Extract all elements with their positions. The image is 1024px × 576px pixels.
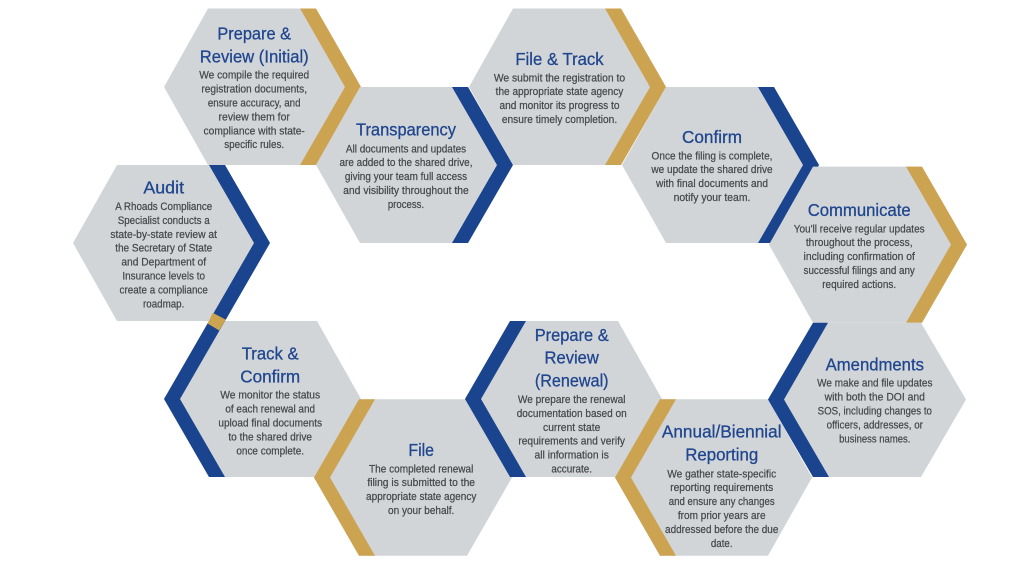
panel: Amendments xyxy=(768,323,966,477)
heading: Annual/Biennial Reporting: Reporting xyxy=(685,445,758,465)
accent chevron: gold xyxy=(615,399,676,556)
text: File & Track description: and monitor its progress to xyxy=(500,100,620,112)
text: Track & Confirm description: once complete. xyxy=(236,445,304,457)
heading: Annual/Biennial Reporting xyxy=(662,422,782,465)
text: Track & Confirm description: We monitor the status xyxy=(220,390,321,402)
text: Prepare & Review (Renewal) description: We prepare the renewal xyxy=(518,394,626,406)
heading: Annual/Biennial Reporting: Annual/Biennial xyxy=(662,422,782,442)
heading: Audit: Audit xyxy=(143,178,184,198)
panel: Communicate xyxy=(769,167,967,323)
text: Confirm description: Once the filing is complete, xyxy=(652,150,772,162)
text: Annual/Biennial Reporting description: and ensure any changes xyxy=(669,496,775,508)
connector: gold link between Audit and Track & Confirm xyxy=(208,313,226,330)
text: Prepare & Review (Renewal) description: requirements and verify xyxy=(518,436,626,448)
text: Prepare & Review description: review them for xyxy=(219,111,290,123)
text: Annual/Biennial Reporting description: addressed before the due xyxy=(665,524,778,536)
text: Communicate description: successful filings and any xyxy=(804,265,915,277)
heading: Amendments: Amendments xyxy=(826,354,924,374)
text: Track & Confirm description: upload final documents xyxy=(218,418,323,430)
accent chevron: blue xyxy=(452,87,513,243)
heading: Communicate: Communicate xyxy=(808,200,911,220)
text: Transparency description: giving your team full access xyxy=(345,171,468,183)
text: Prepare & Review (Renewal) description: all information is xyxy=(535,450,609,462)
text: Audit description: roadmap. xyxy=(143,298,184,310)
panel: Transparency xyxy=(316,87,513,243)
heading: Prepare & Review (Initial): Prepare & xyxy=(217,24,291,44)
panel: Confirm xyxy=(622,87,819,243)
accent chevron: gold xyxy=(314,399,375,556)
text: Audit description: create a compliance xyxy=(120,284,208,296)
heading: Prepare & Review (Renewal): Prepare & xyxy=(535,325,609,345)
text: Annual/Biennial Reporting description: date. xyxy=(711,538,733,550)
text: Annual/Biennial Reporting description: reporting requirements xyxy=(670,482,774,494)
text: Prepare & Review description: We compile the required xyxy=(199,70,309,82)
text: Annual/Biennial Reporting description: from prior years are xyxy=(678,510,766,522)
text: Prepare & Review description: ensure accuracy, and xyxy=(208,98,301,110)
heading: Prepare & Review (Initial) xyxy=(200,24,309,66)
heading: Prepare & Review (Renewal): (Renewal) xyxy=(535,371,609,391)
text: Audit description: A Rhoads Compliance xyxy=(115,201,212,213)
heading: Track & Confirm xyxy=(240,344,300,387)
text: Prepare & Review description xyxy=(199,70,309,151)
heading: Prepare & Review (Renewal) xyxy=(535,325,609,391)
text: Amendments description: with both the DOI and xyxy=(824,392,925,404)
text: Amendments description xyxy=(817,378,933,445)
text: Communicate description: throughout the process, xyxy=(806,237,913,249)
accent chevron: blue xyxy=(164,321,225,477)
text: Audit description xyxy=(110,201,217,310)
text: Amendments description: officers, addresses, or xyxy=(827,419,923,431)
panel: Audit xyxy=(73,165,270,321)
text: Transparency description: process. xyxy=(388,199,424,211)
accent chevron: blue xyxy=(465,321,526,477)
text: Communicate description: You'll receive regular updates xyxy=(794,223,925,235)
heading: Transparency: Transparency xyxy=(356,120,456,140)
text: File description: filing is submitted to the xyxy=(367,477,475,489)
text: Confirm description: we update the shared drive xyxy=(650,164,773,176)
text: Amendments description: We make and file updates xyxy=(817,378,933,390)
text: Prepare & Review (Renewal) description: accurate. xyxy=(551,464,592,476)
text: File & Track description: the appropriate state agency xyxy=(496,86,624,98)
text: Transparency description: All documents and updates xyxy=(346,143,467,155)
panel: File xyxy=(314,399,512,556)
text: Transparency description: are added to the shared drive, xyxy=(340,157,472,169)
text: Confirm description xyxy=(650,150,773,204)
accent chevron: blue xyxy=(758,87,819,243)
text: Annual/Biennial Reporting description: We gather state-specific xyxy=(667,468,777,480)
heading: File & Track: File & Track xyxy=(515,49,604,69)
text: Prepare & Review description: compliance with state- xyxy=(204,125,305,137)
heading: Track & Confirm: Confirm xyxy=(240,367,300,387)
accent chevron: blue xyxy=(209,165,270,321)
text: Prepare & Review (Renewal) description: documentation based on xyxy=(517,408,627,420)
text: Prepare & Review (Renewal) description: current state xyxy=(543,422,600,434)
accent chevron: gold xyxy=(605,8,666,165)
text: Communicate description: required actions. xyxy=(822,279,896,291)
panel: File & Track xyxy=(469,8,666,165)
text: Transparency description: and visibility throughout the xyxy=(343,185,469,197)
text: File description xyxy=(366,463,477,517)
text: Audit description: state-by-state review at xyxy=(110,229,217,241)
text: Confirm description: notify your team. xyxy=(674,192,750,204)
text: Audit description: Specialist conducts a xyxy=(118,215,210,227)
text: Annual/Biennial Reporting description xyxy=(665,468,778,550)
text: File & Track description xyxy=(494,72,625,126)
text: Amendments description: SOS, including changes to xyxy=(818,406,932,418)
panel: Annual/Biennial Reporting xyxy=(615,399,812,556)
text: Track & Confirm description: of each renewal and xyxy=(225,404,315,416)
heading: Confirm: Confirm xyxy=(682,127,742,147)
panel: Prepare & Review (Initial) xyxy=(164,8,361,165)
text: File description: appropriate state agency xyxy=(366,491,477,503)
text: File description: The completed renewal xyxy=(369,463,473,475)
heading: Track & Confirm: Track & xyxy=(242,344,299,364)
text: Amendments description: business names. xyxy=(839,433,910,445)
text: Confirm description: with final documents and xyxy=(655,178,768,190)
panel: Track & Confirm xyxy=(164,321,361,477)
text: File & Track description: We submit the registration to xyxy=(494,72,625,84)
text: Audit description: Insurance levels to xyxy=(122,270,205,282)
text: Communicate description: including confirmation of xyxy=(804,251,916,263)
text: Track & Confirm description xyxy=(218,390,323,457)
heading: File: File xyxy=(408,440,434,460)
panel: Prepare & Review (Renewal) xyxy=(465,321,662,477)
text: Prepare & Review description: specific rules. xyxy=(224,139,284,151)
accent chevron: gold xyxy=(300,8,361,165)
text: File description: on your behalf. xyxy=(388,505,454,517)
heading: Prepare & Review (Initial): Review (Initial) xyxy=(200,46,309,66)
text: Track & Confirm description: to the shared drive xyxy=(228,431,312,443)
text: Audit description: the Secretary of State xyxy=(115,243,212,255)
text: Prepare & Review description: registration documents, xyxy=(201,84,307,96)
text: Communicate description xyxy=(794,223,925,291)
text: Prepare & Review (Renewal) description xyxy=(517,394,627,476)
text: Transparency description xyxy=(340,143,472,211)
heading: Prepare & Review (Renewal): Review xyxy=(545,348,599,368)
text: Audit description: and Department of xyxy=(121,257,207,269)
accent chevron: blue xyxy=(768,323,829,477)
text: File & Track description: ensure timely completion. xyxy=(502,114,617,126)
accent chevron: gold xyxy=(906,167,967,323)
